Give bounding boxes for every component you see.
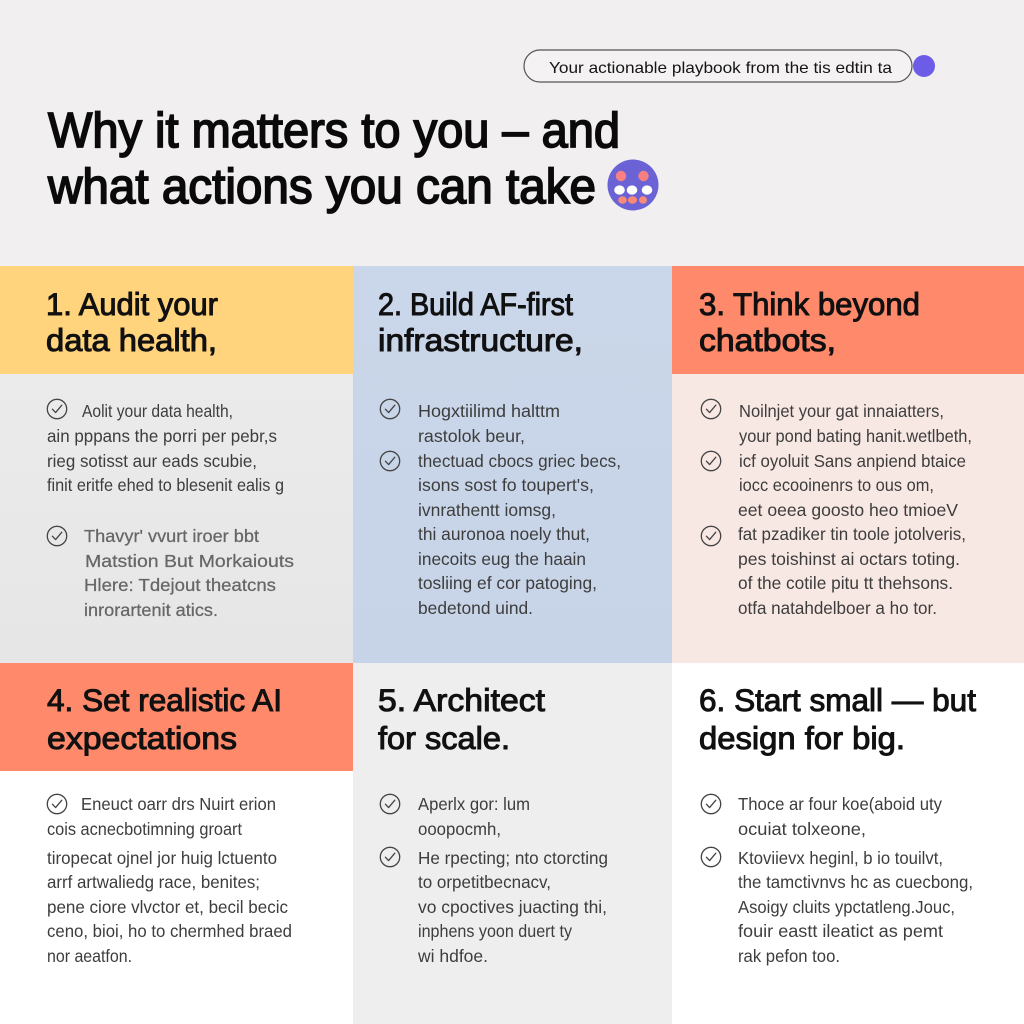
text block: card 5 body: inphens yoon duert ty xyxy=(418,921,572,941)
heading: card 5 xyxy=(378,682,545,756)
text block: card 2 body: bedetond uind. xyxy=(418,598,533,618)
text block: card 4 body xyxy=(47,794,292,966)
text block: card 3 body: icf oyoluit Sans anpiend btaice xyxy=(739,451,966,471)
text block: card 6 body xyxy=(738,794,973,966)
text block: card 3 body: eet oeea goosto heo tmioeV xyxy=(738,500,958,520)
header: card 3: 3. Think beyond xyxy=(699,286,920,322)
icon: check 5b xyxy=(380,847,400,867)
text block: card 4 body: pene ciore vlvctor et, becil becic xyxy=(47,897,288,917)
icon: check 3a xyxy=(701,399,721,419)
text block: card 2 body: Hogxtiilimd halttm xyxy=(418,401,560,421)
text block: card 2 body: thi auronoa noely thut, xyxy=(418,524,590,544)
icon: check 2a xyxy=(380,399,400,419)
text block: card 4 body: arrf artwaliedg race, benites; xyxy=(47,872,260,892)
heading: card 6 xyxy=(699,682,976,756)
text block: card 1 first bullet xyxy=(47,401,284,495)
text block: card 5 body: He rpecting; nto ctorcting xyxy=(418,848,608,868)
panel: 1. audit your data health xyxy=(0,266,353,663)
icon: check 3b xyxy=(701,451,721,471)
text block: card 6 body: the tamctivnvs hc as cuecbong, xyxy=(738,872,973,892)
text block: card 5 body xyxy=(417,794,608,966)
panel: 2. build AF-first infrastructure xyxy=(353,266,672,663)
title: Why it matters to you – and xyxy=(48,104,620,158)
title: what actions you can take xyxy=(47,160,596,214)
text block: card 2 body: inecoits eug the haain xyxy=(418,549,586,569)
panel: 5. architect for scale xyxy=(353,663,672,1024)
header: card 4 xyxy=(0,663,353,771)
text block: card 3 body: fat pzadiker tin toole jotolveris, xyxy=(738,524,966,544)
icon: purple dot xyxy=(913,55,935,77)
text block: card 1 first bullet: ain pppans the porri per pebr,s xyxy=(47,426,277,446)
heading: card 6: 6. Start small — but xyxy=(699,682,976,718)
text block: card 2 body: isons sost fo toupert's, xyxy=(418,475,594,495)
heading: card 5: for scale. xyxy=(378,720,510,756)
text block: card 3 body: of the cotile pitu tt thehsons. xyxy=(738,573,953,593)
text block: card 4 body: Eneuct oarr drs Nuirt erion xyxy=(81,794,276,814)
text block: card 6 body: rak pefon too. xyxy=(738,946,840,966)
text block: card 1 second bullet xyxy=(84,526,294,620)
text block: card 3 body: pes toishinst ai octars toting. xyxy=(738,549,960,569)
icon: check 5a xyxy=(380,794,400,814)
panel: 3. think beyond chatbots xyxy=(672,266,1024,663)
text block: card 3 body: Noilnjet your gat innaiatters, xyxy=(739,401,944,421)
icon: check 1a xyxy=(47,399,67,419)
header: card 1: 1. Audit your xyxy=(46,286,218,322)
text block: card 3 body: iocc ecooinenrs to ous om, xyxy=(739,475,934,495)
text block: card 5 body: to orpetitbecnacv, xyxy=(418,872,551,892)
text block: card 3 body: otfa natahdelboer a ho tor. xyxy=(738,598,937,618)
text block: card 6 body: Thoce ar four koe(aboid uty xyxy=(738,794,942,814)
text block: card 1 first bullet: rieg sotisst aur eads scubie, xyxy=(47,451,257,471)
text block: card 3 body: your pond bating hanit.wetlbeth, xyxy=(739,426,972,446)
text block: card 4 body: tiropecat ojnel jor huig lctuento xyxy=(47,848,277,868)
text block: card 6 body: ocuiat tolxeone, xyxy=(738,819,866,839)
header: card 1 xyxy=(0,266,353,374)
text block: card 2 body: tosliing ef cor patoging, xyxy=(418,573,597,593)
title xyxy=(47,104,620,214)
text block: card 1 second bullet: Thavyr' vvurt iroer bbt xyxy=(84,526,259,546)
header: card 4: 4. Set realistic AI xyxy=(47,682,282,718)
header: card 4: expectations xyxy=(47,720,237,756)
text block: card 1 second bullet: Hlere: Tdejout theatcns xyxy=(84,575,276,595)
panel: 6. start small but design for big xyxy=(672,663,1024,1024)
icon: check 6b xyxy=(701,847,721,867)
heading: card 2: 2. Build AF-first xyxy=(378,286,573,322)
tagline pill xyxy=(524,50,912,82)
text block: card 6 body: fouir eastt ileatict as pemt xyxy=(738,921,943,941)
text block: card 4 body: ceno, bioi, ho to chermhed braed xyxy=(47,921,292,941)
heading: card 2 xyxy=(378,286,583,358)
icon: dotted face badge xyxy=(608,160,658,210)
text block: card 4 body: cois acnecbotimning groart xyxy=(47,819,242,839)
header: card 1: data health, xyxy=(46,322,217,358)
text block: card 2 body: rastolok beur, xyxy=(418,426,525,446)
icon: check 3c xyxy=(701,526,721,546)
heading: card 5: 5. Architect xyxy=(378,682,545,718)
icon: check 4a xyxy=(47,794,67,814)
heading: card 2: infrastructure, xyxy=(378,322,583,358)
text block: card 1 first bullet: Aolit your data health, xyxy=(82,401,233,421)
text block: card 4 body: nor aeatfon. xyxy=(47,946,132,966)
tagline pill: Your actionable playbook from the tis edtin ta xyxy=(549,60,892,77)
icon: check 6a xyxy=(701,794,721,814)
text block: card 5 body: wi hdfoe. xyxy=(417,946,488,966)
text block: card 6 body: Ktoviievx heginl, b io touilvt, xyxy=(738,848,943,868)
text block: card 1 second bullet: inrorartenit atics. xyxy=(84,600,218,620)
text block: card 3 body xyxy=(738,401,972,618)
header: card 3: chatbots, xyxy=(699,322,836,358)
panel: 4. set realistic AI expectations xyxy=(0,663,353,1024)
text block: card 5 body: ooopocmh, xyxy=(418,819,501,839)
text block: card 5 body: Aperlx gor: lum xyxy=(418,794,530,814)
text block: card 5 body: vo cpoctives juacting thi, xyxy=(418,897,607,917)
text block: card 2 body xyxy=(418,401,621,618)
header: card 3 xyxy=(672,266,1024,374)
text block: card 2 body: thectuad cbocs griec becs, xyxy=(418,451,621,471)
text block: card 6 body: Asoigy cluits ypctatleng.Jouc, xyxy=(738,897,955,917)
text block: card 2 body: ivnrathentt iomsg, xyxy=(418,500,556,520)
icon: check 1b xyxy=(47,526,67,546)
heading: card 6: design for big. xyxy=(699,720,905,756)
text block: card 1 first bullet: finit eritfe ehed to blesenit ealis g xyxy=(47,475,284,495)
icon: check 2b xyxy=(380,451,400,471)
text block: card 1 second bullet: Matstion But Morkaiouts xyxy=(85,551,294,571)
